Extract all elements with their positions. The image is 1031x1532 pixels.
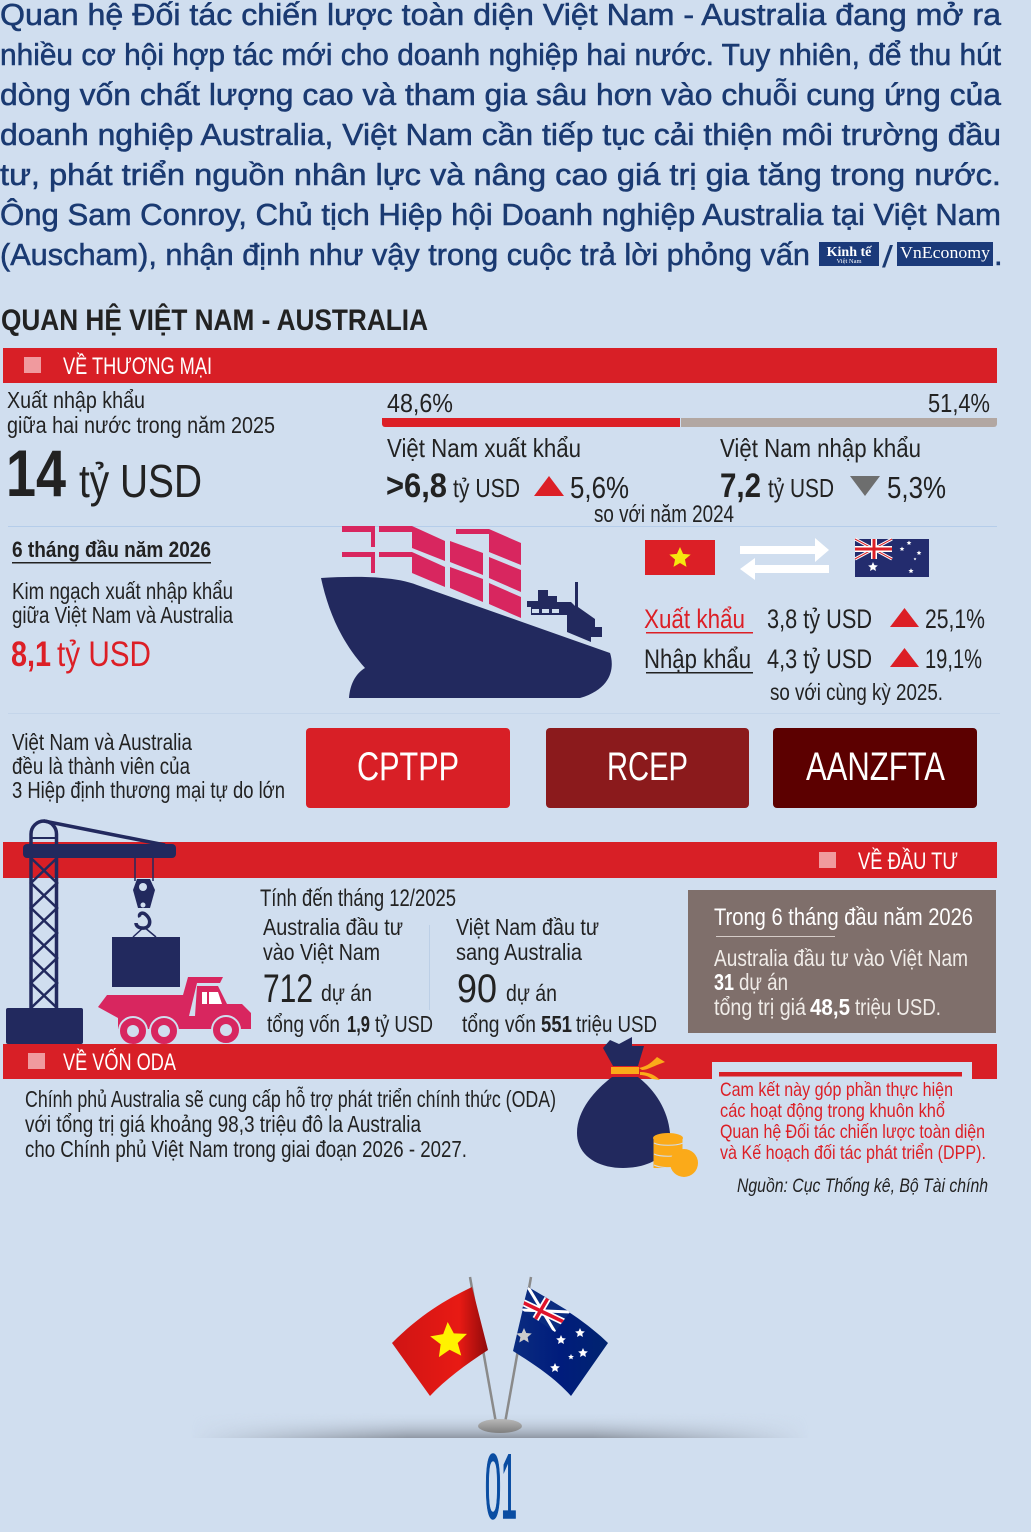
total trade 2025: 14 (6, 436, 66, 510)
intro paragraph: dòng vốn chất lượng cao và tham gia sâu hơn vào chuỗi cung ứng của (0, 77, 1002, 112)
ODA text (25, 1086, 556, 1162)
Vietnam invests in Australia: triệu USD (576, 1011, 657, 1037)
Vietnam invests in Australia (456, 914, 657, 1037)
icon: dump truck (98, 977, 251, 1045)
first half 2026 panel: giữa Việt Nam và Australia (12, 602, 233, 628)
source: Nguồn: Cục Thống kê, Bộ Tài chính (737, 1176, 988, 1197)
panel: first half 2026 investment: Trong 6 tháng đầu năm 2026 (714, 904, 973, 931)
share bar chart: 51,4% (928, 388, 990, 418)
section header: trade: VỀ THƯƠNG MẠI (63, 352, 212, 380)
Australia invests in Vietnam: 712 (263, 967, 313, 1011)
panel: first half 2026 investment: tổng trị giá (714, 994, 806, 1020)
badge: AANZFTA (773, 728, 977, 808)
badge: AANZFTA: AANZFTA (806, 745, 945, 789)
logo: Kinh te Viet Nam: Kinh tế (827, 245, 872, 260)
Australia invests in Vietnam: dự án (321, 980, 372, 1006)
import 2025 (720, 433, 946, 505)
ODA text: Chính phủ Australia sẽ cung cấp hỗ trợ phát triển chính thức (ODA) (25, 1086, 556, 1112)
free trade agreements text: đều là thành viên của (12, 753, 190, 779)
logo: Kinh te Viet Nam (819, 242, 879, 266)
investment date: Tính đến tháng 12/2025 (260, 885, 456, 912)
intro paragraph: doanh nghiệp Australia, Việt Nam cần tiếp tục cải thiện môi trường đầu (0, 117, 1001, 152)
section header: ODA (3, 1044, 997, 1080)
Vietnam invests in Australia: sang Australia (456, 939, 582, 965)
ODA text: cho Chính phủ Việt Nam trong giai đoạn 2026 - 2027. (25, 1136, 467, 1162)
share bar chart: 48,6% (387, 388, 453, 418)
export 2025: tỷ USD (453, 473, 520, 503)
icon: cargo ship (321, 526, 612, 698)
icon: Australia flag (855, 539, 929, 577)
export 2025: >6,8 (386, 467, 447, 505)
ODA text: với tổng trị giá khoảng 98,3 triệu đô la Australia (25, 1111, 421, 1137)
free trade agreements text: Việt Nam và Australia (12, 729, 192, 755)
total trade 2025: giữa hai nước trong năm 2025 (7, 412, 275, 438)
import 2025: tỷ USD (768, 473, 834, 503)
export 2025: 5,6% (570, 470, 629, 505)
Vietnam invests in Australia: 551 (541, 1011, 572, 1037)
free trade agreements text (12, 729, 285, 803)
section header: ODA: VỀ VỐN ODA (63, 1048, 176, 1076)
export row: Xuất khẩu (644, 604, 745, 634)
export 2025 (386, 433, 629, 505)
callout: commitment: Cam kết này góp phần thực hiện (720, 1079, 953, 1101)
badge: RCEP (546, 728, 749, 808)
panel: first half 2026 investment (688, 890, 996, 1033)
icon: Vietnam flag (645, 540, 715, 575)
Vietnam invests in Australia: dự án (506, 980, 557, 1006)
import row: Nhập khẩu (644, 644, 751, 674)
import row (644, 644, 982, 674)
icon: money bag and coins (577, 1037, 698, 1177)
icon: exchange arrows (740, 538, 829, 580)
floor shadow (212, 1420, 787, 1438)
first half 2026 panel: Kim ngạch xuất nhập khẩu (12, 578, 233, 604)
total trade 2025 (6, 387, 275, 510)
total trade 2025: Xuất nhập khẩu (7, 387, 145, 413)
icon: crossed flags (392, 1277, 608, 1433)
export row: 3,8 tỷ USD (767, 604, 872, 634)
panel: first half 2026 investment: triệu USD. (855, 994, 941, 1020)
export 2025: Việt Nam xuất khẩu (387, 433, 581, 463)
Australia invests in Vietnam: vào Việt Nam (263, 939, 380, 965)
Australia invests in Vietnam (263, 914, 433, 1037)
badge: CPTPP (306, 728, 510, 808)
Australia invests in Vietnam: tỷ USD (375, 1011, 433, 1037)
logo: VnEconomy: VnEconomy (900, 243, 991, 262)
import 2025: 5,3% (887, 470, 946, 505)
first half 2026 panel: 6 tháng đầu năm 2026 (12, 537, 211, 562)
Vietnam invests in Australia: tổng vốn (462, 1011, 536, 1037)
intro paragraph: nhiều cơ hội hợp tác mới cho doanh nghiệp hai nước. Tuy nhiên, để thu hút (0, 37, 1001, 72)
intro paragraph (0, 0, 1003, 274)
Australia invests in Vietnam: Australia đầu tư (263, 914, 403, 940)
callout: commitment: các hoạt động trong khuôn khổ (720, 1100, 945, 1122)
Vietnam invests in Australia: Việt Nam đầu tư (456, 914, 599, 940)
first half 2026 panel (11, 537, 233, 674)
import row: 4,3 tỷ USD (767, 644, 872, 674)
panel: first half 2026 investment: Australia đầu tư vào Việt Nam (714, 945, 968, 971)
export row (644, 604, 985, 634)
callout: commitment (720, 1079, 986, 1164)
export row: 25,1% (925, 604, 985, 634)
import row: 19,1% (925, 644, 982, 674)
Australia invests in Vietnam: tổng vốn (267, 1011, 340, 1037)
panel: first half 2026 investment: 48,5 (810, 994, 850, 1020)
intro paragraph: (Auscham), nhận định như vậy trong cuộc trả lời phỏng vấn (0, 237, 810, 272)
icon: crane (6, 821, 180, 1044)
import 2025: 7,2 (720, 467, 761, 505)
panel: first half 2026 investment: 31 (714, 969, 734, 995)
intro paragraph: Ông Sam Conroy, Chủ tịch Hiệp hội Doanh nghiệp Australia tại Việt Nam (0, 197, 1001, 232)
intro paragraph: / (882, 239, 893, 274)
free trade agreements text: 3 Hiệp định thương mại tự do lớn (12, 777, 285, 803)
logo: Kinh te Viet Nam: Việt Nam (836, 258, 862, 265)
intro paragraph: . (994, 237, 1003, 272)
Vietnam invests in Australia: 90 (457, 967, 497, 1011)
import 2025: Việt Nam nhập khẩu (720, 433, 921, 463)
total trade 2025: tỷ USD (79, 455, 202, 507)
section header: investment: VỀ ĐẦU TƯ (858, 847, 958, 875)
badge: RCEP: RCEP (607, 745, 688, 789)
share bar chart (382, 388, 997, 427)
panel: first half 2026 investment: dự án (739, 969, 788, 995)
main heading: QUAN HỆ VIỆT NAM - AUSTRALIA (1, 303, 428, 337)
section header: investment (3, 842, 997, 878)
Australia invests in Vietnam: 1,9 (347, 1011, 370, 1037)
comparison note: so với năm 2024 (594, 501, 734, 528)
section header: trade (3, 348, 997, 383)
intro paragraph: tư, phát triển nguồn nhân lực và nâng cao giá trị gia tăng trong nước. (0, 157, 1001, 192)
first half 2026 panel: tỷ USD (57, 635, 151, 674)
badge: CPTPP: CPTPP (357, 745, 459, 789)
comparison note: so với cùng kỳ 2025. (770, 679, 943, 705)
first half 2026 panel: 8,1 (11, 635, 51, 674)
